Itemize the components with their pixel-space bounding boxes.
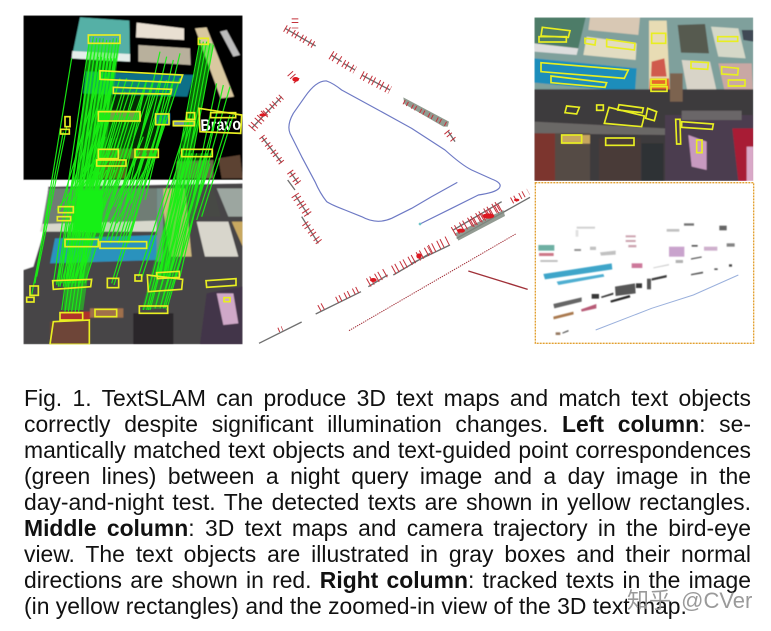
- caption text: mantically matched text objects and text-guided point correspondences: [24, 436, 751, 462]
- yellow detections: [539, 27, 745, 153]
- green band overlays: [55, 43, 213, 310]
- watermark: 知乎 @CVer: [627, 588, 752, 613]
- caption text: Fig. 1. TextSLAM can produce 3D text maps and match text objects: [24, 384, 751, 410]
- trajectory start marker: [419, 223, 421, 225]
- caption text: day-and-night test. The detected texts are shown in yellow rectangles.: [24, 488, 751, 514]
- caption text: correctly despite significant illumination changes. Left column: se-: [24, 410, 751, 436]
- caption text: [24, 384, 751, 619]
- zoomed-in 3D text map box: [535, 183, 754, 343]
- red normal clusters: [259, 77, 519, 282]
- solid red wall line: [468, 271, 528, 289]
- dense correspondences blob: [73, 190, 103, 233]
- zoomed trajectory: [596, 275, 738, 330]
- red normal directions: [252, 18, 528, 330]
- Bravo neon sign: Bravo: [200, 115, 241, 135]
- caption text: view. The text objects are illustrated in gray boxes and their normal: [24, 540, 751, 566]
- caption text: (in yellow rectangles) and the zoomed-in view of the 3D text map.: [24, 592, 687, 618]
- night query image: [23, 15, 243, 180]
- dotted red wall line: [349, 234, 516, 331]
- green point correspondences: [32, 37, 233, 313]
- gray text boxes: [252, 28, 530, 343]
- day image: [23, 180, 243, 344]
- panel: right column tracked texts and zoomed 3D map: [534, 17, 754, 343]
- caption text: (green lines) between a night query image and a day image in the: [24, 462, 751, 488]
- caption text: directions are shown in red. Right column: tracked texts in the image: [24, 566, 751, 592]
- panel: left column day and night match: [23, 15, 243, 344]
- caption text: Middle column: 3D text maps and camera trajectory in the bird-eye: [24, 514, 751, 540]
- zoomed 3D text boxes: [538, 223, 735, 335]
- camera trajectory: [289, 81, 500, 224]
- yellow text detections: [27, 35, 242, 344]
- figure artwork: three image columns: [23, 15, 754, 344]
- thick gray text cluster: [403, 97, 449, 127]
- tracked image: [534, 17, 753, 181]
- panel: middle column bird-eye 3D text map: [252, 18, 530, 343]
